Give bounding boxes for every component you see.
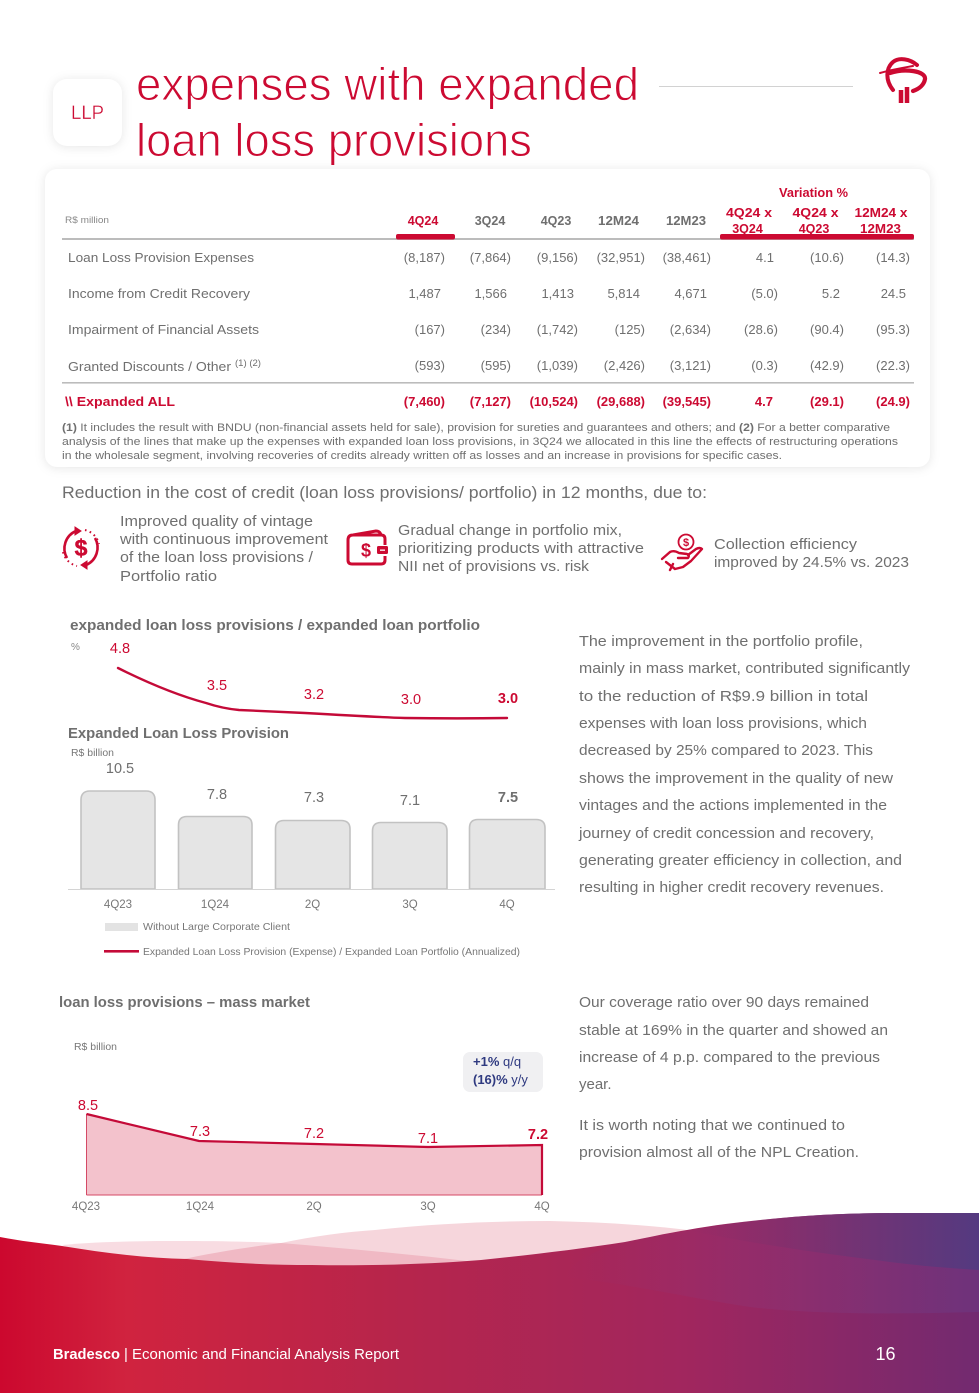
line chart: provisions ratio: 3.2 — [304, 687, 324, 703]
line chart: provisions ratio — [71, 641, 518, 718]
row: Impairment of Financial Assets: (234) — [481, 322, 511, 337]
text block: portfolio profile commentary: generating greater efficiency in collection, and — [579, 852, 902, 869]
area chart: mass market provisions: 8.5 — [78, 1098, 98, 1114]
row: Loan Loss Provision Expenses — [68, 250, 910, 265]
row: Granted Discounts / Other: (0.3) — [751, 358, 778, 373]
row: Income from Credit Recovery: 1,413 — [541, 286, 574, 301]
text block: coverage ratio commentary: Our coverage ratio over 90 days remained — [579, 994, 869, 1011]
text block: coverage ratio commentary: increase of 4 p.p. compared to the previous — [579, 1049, 880, 1066]
icon badge: LLP — [53, 79, 122, 146]
row: Impairment of Financial Assets: Impairment of Financial Assets — [68, 322, 260, 337]
row: Loan Loss Provision Expenses: Loan Loss Provision Expenses — [68, 250, 255, 265]
row: Expanded ALL total: (10,524) — [530, 394, 578, 409]
bar chart: expanded loan loss provision: 4Q23 — [104, 899, 132, 911]
bar chart: expanded loan loss provision: 10.5 — [106, 761, 134, 777]
row: Loan Loss Provision Expenses: 4.1 — [756, 250, 774, 265]
row: Expanded ALL total: (24.9) — [876, 394, 910, 409]
area chart: mass market provisions — [72, 1041, 550, 1213]
callout: q/q and y/y change — [463, 1052, 543, 1092]
text: gradual change in portfolio mix: prioritizing products with attractive — [398, 540, 644, 557]
area chart: mass market provisions: 4Q23 — [72, 1201, 100, 1213]
row: Loan Loss Provision Expenses: (14.3) — [876, 250, 910, 265]
row: Income from Credit Recovery: Income from Credit Recovery — [68, 286, 251, 301]
row: Impairment of Financial Assets: (28.6) — [744, 322, 778, 337]
text: gradual change in portfolio mix: Gradual change in portfolio mix, — [398, 522, 622, 539]
title: loan loss provisions — [136, 114, 532, 166]
line chart: provisions ratio: % — [71, 642, 80, 653]
bar chart: expanded loan loss provision: 7.5 — [498, 790, 518, 806]
legend: Without Large Corporate Client — [143, 921, 290, 933]
row: Granted Discounts / Other: (3,121) — [670, 358, 711, 373]
table header: R$ million — [65, 215, 109, 226]
row: Income from Credit Recovery: 5,814 — [607, 286, 640, 301]
table footnotes: analysis of the lines that make up the expenses with expanded loan loss provisions, in 3Q24 we allocated in this line the effects of restructuring operations — [62, 436, 898, 448]
icon badge: LLP: LLP — [71, 103, 104, 124]
text block: coverage ratio commentary — [579, 994, 888, 1161]
legend: Expanded Loan Loss Provision (Expense) / Expanded Loan Portfolio (Annualized) — [143, 946, 520, 958]
area chart: mass market provisions: 4Q — [534, 1201, 550, 1213]
text: improved quality of vintage: Improved quality of vintage — [120, 513, 313, 530]
chart heading: mass market: loan loss provisions – mass market — [59, 994, 310, 1011]
row: Income from Credit Recovery: 24.5 — [881, 286, 906, 301]
table header: Variation % — [779, 186, 848, 200]
text: improved quality of vintage: of the loan loss provisions / — [120, 549, 314, 566]
row: Expanded ALL total: (29.1) — [810, 394, 844, 409]
icon: hand with coin: $ — [683, 537, 689, 549]
bar chart: expanded loan loss provision: 1Q24 — [201, 899, 230, 911]
row: Impairment of Financial Assets: (1,742) — [537, 322, 578, 337]
footer wave background — [0, 1213, 979, 1393]
bar chart: expanded loan loss provision: 4Q — [499, 899, 515, 911]
area chart: mass market provisions: 7.2 — [528, 1127, 548, 1143]
callout: q/q and y/y change: +1% q/q — [473, 1054, 521, 1069]
text: gradual change in portfolio mix — [398, 522, 644, 575]
text block: coverage ratio commentary: year. — [579, 1076, 612, 1093]
row: Impairment of Financial Assets — [68, 322, 910, 337]
table footnotes: (1) It includes the result with BNDU (non-financial assets held for sale), provision for sureties and guarantees and others; and (2) For a better comparative — [62, 422, 890, 434]
icon: dollar cycle: $ — [75, 535, 88, 561]
row: Expanded ALL total: (39,545) — [663, 394, 711, 409]
row: Expanded ALL total: \\ Expanded ALL — [65, 394, 175, 409]
table header: 12M23 — [860, 222, 901, 236]
text block: portfolio profile commentary: resulting in higher credit recovery revenues. — [579, 879, 884, 896]
text: improved quality of vintage: Portfolio ratio — [120, 568, 217, 585]
row: Impairment of Financial Assets: (2,634) — [670, 322, 711, 337]
chart heading: expanded loan loss provision: Expanded Loan Loss Provision — [68, 725, 289, 742]
text block: portfolio profile commentary: journey of credit concession and recovery, — [578, 825, 874, 842]
text block: coverage ratio commentary: It is worth noting that we continued to — [579, 1117, 845, 1134]
table header: 3Q24 — [732, 222, 763, 236]
panel: results table — [45, 169, 930, 467]
row: Income from Credit Recovery: 5.2 — [822, 286, 840, 301]
text: improved quality of vintage: with continuous improvement — [119, 531, 329, 548]
table header: 4Q23 — [541, 214, 571, 228]
icon: hand with coin — [662, 534, 702, 570]
row: Income from Credit Recovery: 1,566 — [474, 286, 507, 301]
area chart: mass market provisions: R$ billion — [74, 1041, 117, 1053]
table footnotes: in the wholesale segment, involving recoveries of credits already written off as losses and an increase in provisions for specific cases. — [62, 450, 782, 462]
heading: reduction in cost of credit: Reduction in the cost of credit (loan loss provisions/ portfolio) in 12 months, due to: — [62, 484, 707, 502]
area chart: mass market provisions: 7.2 — [304, 1126, 324, 1142]
row: Loan Loss Provision Expenses: (7,864) — [470, 250, 511, 265]
row: Income from Credit Recovery: (5.0) — [751, 286, 778, 301]
callout: q/q and y/y change: (16)% y/y — [473, 1072, 528, 1087]
text: collection efficiency — [714, 536, 909, 571]
row: Granted Discounts / Other: (22.3) — [876, 358, 910, 373]
icon: wallet — [348, 531, 388, 564]
row: Impairment of Financial Assets: (167) — [415, 322, 445, 337]
text: collection efficiency: Collection efficiency — [714, 536, 858, 553]
text block: portfolio profile commentary: expenses with loan loss provisions, which — [579, 715, 867, 732]
row: Granted Discounts / Other: (1) (2) — [235, 358, 261, 369]
table header: 4Q24 x — [726, 206, 772, 220]
line chart: provisions ratio: 3.5 — [207, 678, 227, 694]
bar chart: expanded loan loss provision: 7.1 — [400, 793, 420, 809]
title: expenses with expanded — [136, 58, 639, 110]
area chart: mass market provisions: 1Q24 — [186, 1201, 215, 1213]
text block: portfolio profile commentary: shows the improvement in the quality of new — [579, 770, 893, 787]
bar chart: expanded loan loss provision: 2Q — [305, 899, 320, 911]
table header: 4Q24 x — [792, 206, 839, 220]
row: Income from Credit Recovery: 4,671 — [674, 286, 707, 301]
row: Loan Loss Provision Expenses: (9,156) — [537, 250, 578, 265]
table header: 4Q24 — [408, 214, 438, 228]
row: Loan Loss Provision Expenses: (10.6) — [810, 250, 844, 265]
title — [136, 58, 639, 166]
row: Expanded ALL total: 4.7 — [755, 394, 773, 409]
table header: 12M24 — [598, 214, 639, 228]
row: Expanded ALL total: (7,460) — [404, 394, 445, 409]
row: Granted Discounts / Other: (595) — [481, 358, 511, 373]
table header: 12M23 — [666, 214, 706, 228]
row: Income from Credit Recovery: 1,487 — [408, 286, 441, 301]
row: Expanded ALL total: (29,688) — [597, 394, 645, 409]
row: Income from Credit Recovery — [68, 286, 906, 301]
table header: 3Q24 — [475, 214, 505, 228]
page number: 16 — [875, 1344, 896, 1364]
text block: portfolio profile commentary: mainly in mass market, contributed significantly — [579, 660, 911, 677]
row: Impairment of Financial Assets: (125) — [615, 322, 645, 337]
row: Granted Discounts / Other: (593) — [415, 358, 445, 373]
line chart: provisions ratio: 4.8 — [110, 641, 130, 657]
footer text: Bradesco — [53, 1347, 120, 1363]
icon: Bradesco logo — [880, 59, 925, 103]
text block: portfolio profile commentary: vintages and the actions implemented in the — [579, 797, 887, 814]
bar chart: expanded loan loss provision: R$ billion — [71, 747, 114, 759]
row: Impairment of Financial Assets: (90.4) — [810, 322, 844, 337]
chart heading: provisions / portfolio: expanded loan loss provisions / expanded loan portfolio — [70, 617, 480, 634]
row: Granted Discounts / Other — [68, 358, 910, 374]
row: Expanded ALL total: (7,127) — [470, 394, 511, 409]
row: Granted Discounts / Other: (1,039) — [537, 358, 578, 373]
area chart: mass market provisions: 7.3 — [190, 1124, 210, 1140]
text block: portfolio profile commentary: to the reduction of R$9.9 billion in total — [579, 688, 868, 705]
table header: 12M24 x — [854, 206, 908, 220]
text block: coverage ratio commentary: stable at 169% in the quarter and showed an — [579, 1022, 888, 1039]
bar chart: expanded loan loss provision: 7.3 — [304, 790, 324, 806]
line chart: provisions ratio: 3.0 — [498, 691, 518, 707]
row: Loan Loss Provision Expenses: (8,187) — [404, 250, 445, 265]
table footnotes — [62, 422, 898, 462]
footer text: | Economic and Financial Analysis Report — [124, 1347, 399, 1363]
area chart: mass market provisions: 7.1 — [418, 1131, 438, 1147]
legend — [104, 921, 520, 958]
bar chart: expanded loan loss provision: 7.8 — [207, 787, 227, 803]
text block: portfolio profile commentary: decreased by 25% compared to 2023. This — [579, 742, 873, 759]
bar chart: expanded loan loss provision — [68, 747, 555, 911]
row: Granted Discounts / Other: Granted Discounts / Other — [68, 359, 232, 374]
row: Loan Loss Provision Expenses: (32,951) — [597, 250, 645, 265]
row: Granted Discounts / Other: (42.9) — [810, 358, 844, 373]
icon: wallet: $ — [361, 540, 371, 560]
table header — [65, 186, 908, 236]
bar chart: expanded loan loss provision: 3Q — [402, 899, 418, 911]
text: improved quality of vintage — [119, 513, 329, 585]
row: Impairment of Financial Assets: (95.3) — [876, 322, 910, 337]
text: gradual change in portfolio mix: NII net of provisions vs. risk — [398, 558, 590, 575]
row: Expanded ALL total — [65, 394, 910, 409]
text block: portfolio profile commentary: The improvement in the portfolio profile, — [579, 633, 863, 650]
table header: 4Q23 — [799, 222, 829, 236]
icon: dollar cycle — [63, 527, 99, 569]
line chart: provisions ratio: 3.0 — [401, 692, 421, 708]
row: Loan Loss Provision Expenses: (38,461) — [663, 250, 711, 265]
text block: coverage ratio commentary: provision almost all of the NPL Creation. — [579, 1144, 859, 1161]
area chart: mass market provisions: 3Q — [420, 1201, 436, 1213]
area chart: mass market provisions: 2Q — [306, 1201, 322, 1213]
row: Granted Discounts / Other: (2,426) — [604, 358, 645, 373]
text block: portfolio profile commentary — [578, 633, 911, 896]
text: collection efficiency: improved by 24.5% vs. 2023 — [714, 554, 909, 571]
